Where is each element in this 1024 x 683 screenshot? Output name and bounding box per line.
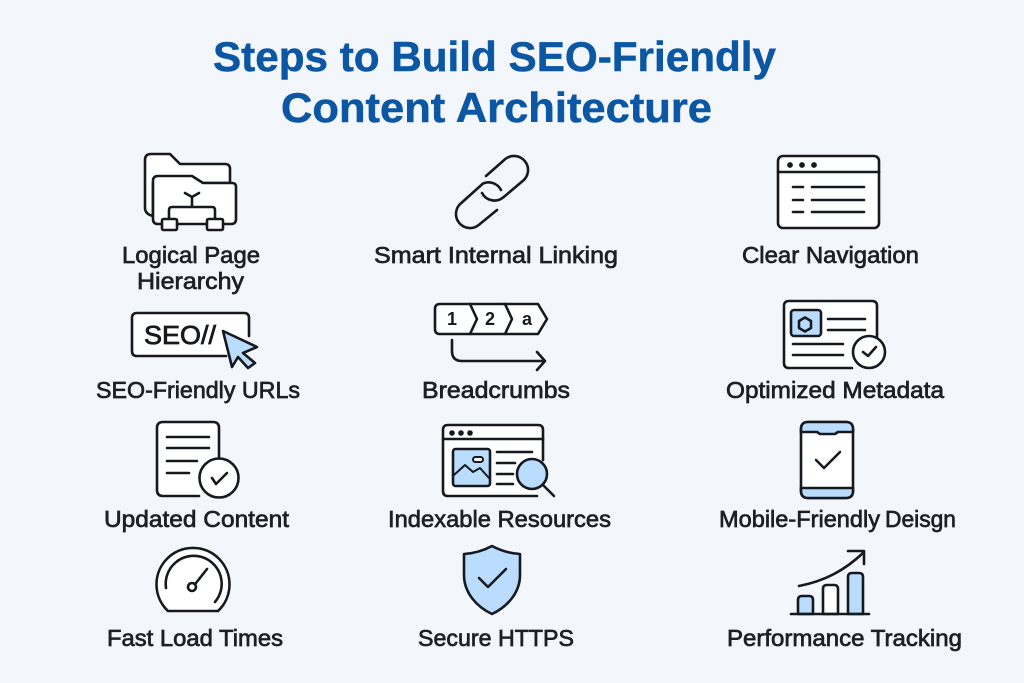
step: Indexable Resources (388, 425, 611, 532)
icon: URL box with cursor: SEO// (144, 320, 217, 350)
icon: document with check (157, 422, 238, 498)
step: Fast Load Times (107, 548, 283, 651)
label: Breadcrumbs (422, 377, 570, 403)
icon: breadcrumb trail (435, 304, 547, 370)
step: Logical Page Hierarchy (122, 154, 260, 294)
label: Mobile-Friendly (719, 506, 881, 532)
label (122, 242, 260, 294)
title: Steps to Build SEO-Friendly (213, 33, 777, 80)
label: Smart Internal Linking (374, 242, 618, 268)
step: Updated Content (104, 422, 290, 532)
label: Logical Page (122, 242, 260, 268)
icon: breadcrumb trail: 2 (485, 309, 495, 329)
step: SEO-Friendly URLs (96, 313, 300, 403)
icon: folder hierarchy (145, 154, 236, 230)
label: SEO-Friendly URLs (96, 377, 300, 403)
icon: metadata card (784, 301, 885, 368)
step: Performance Tracking (727, 551, 962, 651)
label: Updated Content (104, 506, 290, 532)
title: Content Architecture (281, 84, 712, 131)
icon: speedometer (156, 548, 230, 611)
step: Smart Internal Linking (374, 156, 618, 268)
step: Mobile-Friendly Design (719, 422, 956, 532)
icon: breadcrumb trail: 1 (447, 309, 457, 329)
icon: chain link (456, 156, 528, 228)
label: Clear Navigation (742, 242, 919, 268)
step: Breadcrumbs (422, 304, 570, 403)
label: Hierarchy (137, 268, 245, 294)
step: Secure HTTPS (418, 546, 574, 651)
label: Indexable Resources (388, 506, 611, 532)
icon: browser menu (778, 156, 879, 228)
step: Clear Navigation (742, 156, 919, 268)
icon: mobile phone (801, 422, 853, 498)
label: Secure HTTPS (418, 625, 574, 651)
icon: web page with image and magnifier (443, 425, 554, 496)
step: Optimized Metadata (726, 301, 944, 403)
label: Performance Tracking (727, 625, 962, 651)
icon: breadcrumb trail: a (522, 309, 533, 329)
label (719, 506, 956, 532)
icon: shield with check (464, 546, 520, 614)
icon: rising bar chart (791, 551, 869, 614)
label: Fast Load Times (107, 625, 283, 651)
icon: URL box with cursor (132, 313, 257, 368)
label: Optimized Metadata (726, 377, 944, 403)
label: Deisgn (885, 506, 956, 532)
title (213, 33, 777, 131)
